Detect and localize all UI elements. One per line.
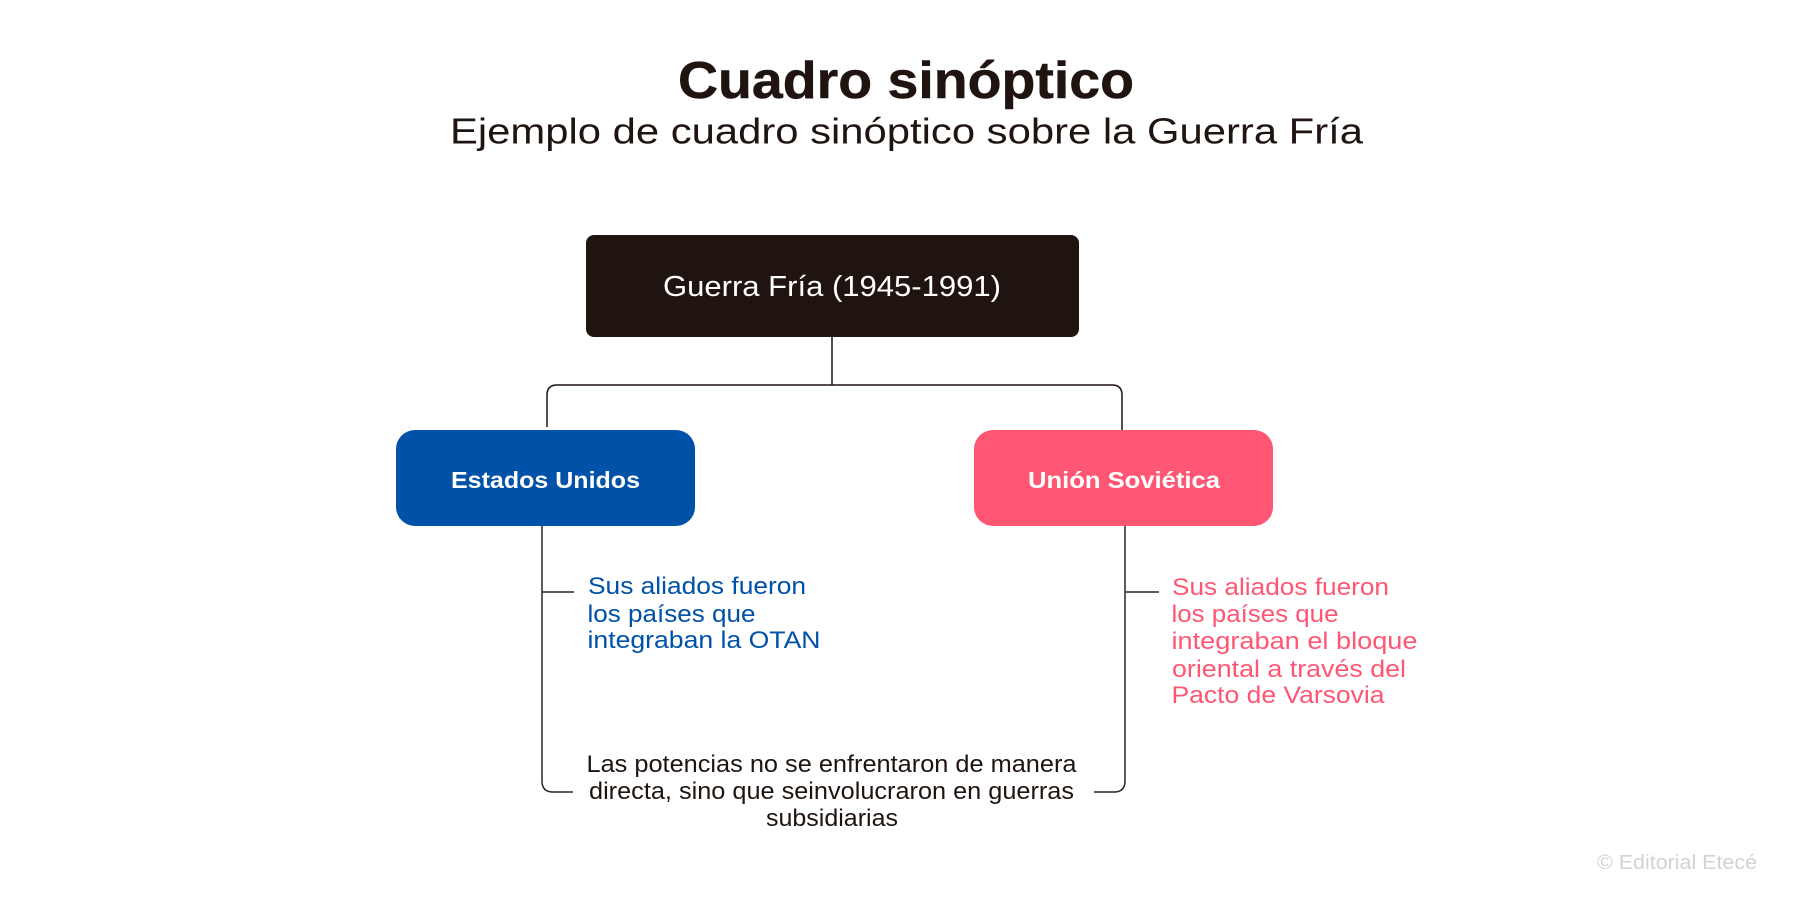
text: allies of the Soviet Union: Pacto de Varsovia xyxy=(1172,682,1385,709)
box: Estados Unidos xyxy=(396,430,695,526)
text: allies of the United States: los países que xyxy=(588,601,756,628)
text: allies of the United States: Sus aliados fueron xyxy=(588,573,806,600)
text: allies of the Soviet Union xyxy=(1172,574,1418,709)
connector: left and right brackets xyxy=(542,526,1159,792)
connector: top box to branches xyxy=(547,336,1122,431)
text: allies of the United States: integraban la OTAN xyxy=(588,627,820,654)
title: Cuadro sinóptico xyxy=(678,52,1134,110)
text: proxy wars note: Las potencias no se enfrentaron de manera xyxy=(586,751,1077,778)
subtitle: Ejemplo de cuadro sinóptico sobre la Guerra Fría xyxy=(450,110,1364,152)
text: allies of the Soviet Union: Sus aliados fueron xyxy=(1172,574,1389,601)
text: proxy wars note: subsidiarias xyxy=(766,805,898,832)
box: Unión Soviética: Unión Soviética xyxy=(1028,467,1220,493)
box: Guerra Fría xyxy=(586,235,1079,337)
box: Unión Soviética xyxy=(974,430,1273,526)
text: allies of the United States xyxy=(588,573,820,654)
text: allies of the Soviet Union: oriental a través del xyxy=(1172,656,1406,683)
text: proxy wars note xyxy=(586,751,1077,832)
text: proxy wars note: directa, sino que seinvolucraron en guerras xyxy=(589,778,1074,805)
box: Guerra Fría: Guerra Fría (1945-1991) xyxy=(663,271,1001,303)
text: allies of the Soviet Union: los países que xyxy=(1172,601,1338,628)
credit: © Editorial Etecé xyxy=(1597,852,1757,874)
box: Estados Unidos: Estados Unidos xyxy=(451,467,640,493)
text: allies of the Soviet Union: integraban el bloque xyxy=(1172,628,1418,655)
